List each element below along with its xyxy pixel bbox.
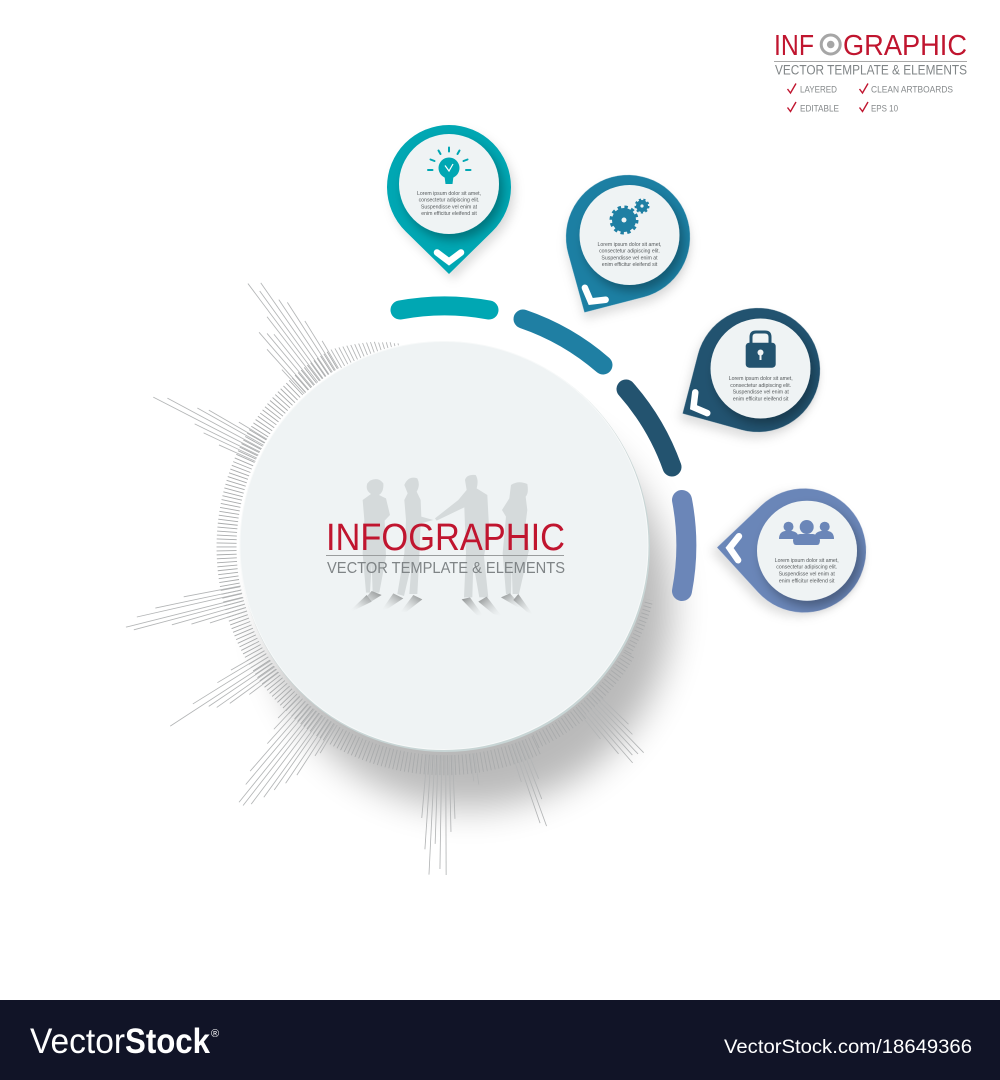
pin 2 text: enim efficitur eleifend sit	[602, 262, 658, 268]
arc segment 3	[626, 389, 672, 467]
icon: padlock	[746, 332, 776, 368]
pin 2 inner circle	[580, 185, 680, 285]
pin 3 text: enim efficitur eleifend sit	[733, 396, 789, 402]
central disc	[240, 342, 650, 752]
top right logo	[774, 30, 967, 114]
long rays: lower right cluster	[576, 691, 644, 763]
silhouette figures	[363, 475, 529, 597]
radial line burst around disc	[126, 283, 649, 875]
arc segment 4	[682, 500, 686, 591]
panel: pin 2 settings	[531, 152, 713, 343]
pin 4 chevron	[729, 536, 739, 560]
pin 4 text: enim efficitur eleifend sit	[779, 578, 835, 584]
feature checklist: CLEAN ARTBOARDS	[871, 85, 953, 95]
pin 1 text	[417, 191, 481, 217]
pin 3 text: Lorem ipsum dolor sit amet,	[729, 376, 793, 382]
logo wordmark left part: INF	[774, 30, 814, 62]
pin 2 text: Lorem ipsum dolor sit amet,	[597, 242, 662, 248]
footer bar	[0, 1000, 1000, 1080]
disc face	[240, 342, 648, 750]
pin 2 text	[597, 242, 662, 268]
logo target icon	[821, 35, 840, 54]
footer image id: VectorStock.com/18649366	[724, 1036, 972, 1058]
logo subtitle: VECTOR TEMPLATE & ELEMENTS	[775, 62, 967, 78]
pin 4 text: Suspendisse vel enim at	[779, 571, 835, 577]
pin 4 text: Lorem ipsum dolor sit amet,	[775, 558, 839, 564]
silhouette ground shadows	[351, 591, 533, 616]
pin 1 shape	[387, 125, 511, 274]
long rays: upper left cluster	[248, 283, 338, 394]
icon: people	[779, 520, 834, 545]
pin 4 inner circle	[757, 501, 857, 601]
tapering ticks near top	[331, 342, 398, 368]
pin 4 text: consectetur adipiscing elit.	[776, 565, 837, 571]
long rays: left lower cluster	[126, 586, 247, 630]
pin 1 chevron	[437, 252, 461, 262]
central title: INFOGRAPHIC	[326, 517, 565, 559]
arc segment 1	[400, 306, 489, 310]
pin 3 text: Suspendisse vel enim at	[733, 390, 789, 396]
footer brand	[30, 1022, 219, 1061]
panel: pin 4 team	[715, 486, 868, 615]
pin 1 text: Suspendisse vel enim at	[421, 204, 478, 210]
icon: gears	[611, 200, 648, 233]
footer background	[0, 1000, 1000, 1080]
icon: light bulb	[428, 148, 470, 184]
business people silhouettes	[351, 475, 533, 616]
long rays: bottom right cluster	[470, 740, 547, 826]
pin 2 chevron	[580, 288, 606, 308]
pin 3 text	[729, 376, 793, 402]
footer brand: Stock	[125, 1022, 210, 1061]
logo wordmark right part: GRAPHIC	[843, 30, 967, 62]
pin 3 text: consectetur adipiscing elit.	[730, 383, 791, 389]
logo underline	[774, 61, 967, 62]
panel: pin 1 idea	[387, 125, 511, 274]
feature checklist: EPS 10	[871, 104, 898, 114]
long rays: lower left cluster	[170, 651, 279, 726]
feature checklist: EDITABLE	[800, 104, 839, 114]
central subtitle: VECTOR TEMPLATE & ELEMENTS	[327, 560, 565, 577]
footer brand: Vector	[30, 1022, 125, 1061]
pin 4 text	[775, 558, 839, 584]
long rays: bottom cluster	[422, 754, 455, 875]
pin 2 text: consectetur adipiscing elit.	[599, 249, 660, 255]
central title rule	[326, 555, 564, 556]
pin 1 inner circle	[399, 134, 499, 234]
pin 1 text: enim efficitur eleifend sit	[421, 211, 477, 217]
pin 2 text: Suspendisse vel enim at	[601, 255, 658, 261]
disc shadow	[268, 404, 672, 808]
pin 3 chevron	[687, 392, 707, 418]
pin 3 inner circle	[710, 318, 810, 418]
feature checklist: LAYERED	[800, 85, 837, 95]
long rays: left upper cluster	[153, 397, 267, 461]
disc rim	[240, 342, 650, 752]
pin 3 shape	[652, 285, 843, 467]
pin 2 shape	[531, 152, 713, 343]
pin 1 text: Lorem ipsum dolor sit amet,	[417, 191, 481, 197]
pin 1 text: consectetur adipiscing elit.	[419, 198, 479, 204]
footer brand: ®	[211, 1028, 219, 1040]
feature checklist	[788, 84, 953, 114]
base tick ring	[227, 360, 649, 765]
panel: pin 3 security	[652, 285, 843, 467]
arc segment 2	[523, 319, 603, 365]
pin 4 shape	[715, 486, 868, 615]
long rays: bottom left cluster	[239, 696, 337, 805]
